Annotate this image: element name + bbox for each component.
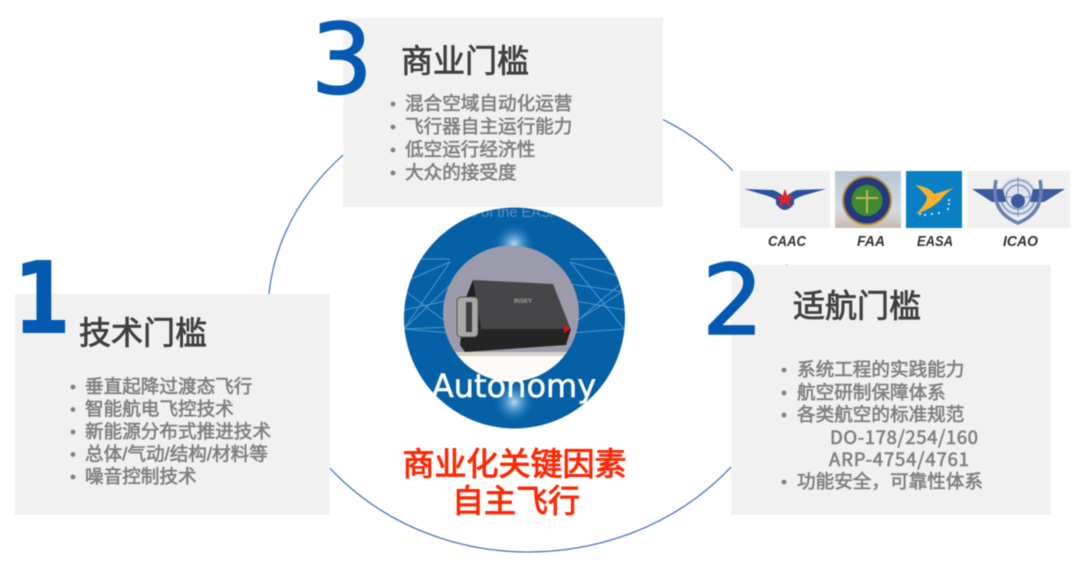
heading: technical threshold: 技术门槛 [79, 315, 207, 351]
list: commercial items [391, 93, 572, 183]
logo label: EASA: EASA [917, 233, 953, 250]
logo: ICAO [967, 171, 1070, 228]
cycle ring [268, 88, 793, 552]
panel: commercial threshold [311, 3, 663, 207]
badge label: Autonomy [432, 367, 596, 405]
number 2: 2 [702, 244, 764, 357]
panel: logos [733, 160, 1080, 264]
red caption: 商业化关键因素 [402, 446, 627, 482]
badge background pattern [404, 205, 625, 424]
logo label: FAA: FAA [857, 233, 885, 250]
device photo: INSKY [514, 299, 532, 305]
number 3: 3 [311, 3, 373, 116]
logo: EASA [906, 171, 962, 228]
logo label: CAAC: CAAC [768, 233, 807, 250]
list: airworthiness items: 功能安全，可靠性体系 [797, 471, 983, 492]
list: commercial items: 混合空域自动化运营 [405, 93, 572, 114]
list: technical items: 垂直起降过渡态飞行 [85, 376, 252, 397]
list: technical items: 新能源分布式推进技术 [85, 421, 271, 442]
list: airworthiness items: 航空研制保障体系 [797, 382, 946, 403]
list: commercial items: 大众的接受度 [405, 162, 517, 183]
list: technical items: 总体/气动/结构/材料等 [85, 444, 268, 464]
logo label: ICAO: ICAO [1003, 233, 1038, 250]
heading: commercial threshold: 商业门槛 [401, 43, 529, 79]
list: technical items: 噪音控制技术 [85, 466, 197, 487]
panel: airworthiness threshold [702, 244, 1051, 515]
list: airworthiness items [782, 359, 983, 492]
panel: technical threshold [13, 241, 330, 515]
logo: FAA [835, 171, 901, 228]
list: airworthiness items: DO-178/254/160 [830, 423, 978, 450]
list: commercial items: 低空运行经济性 [405, 139, 535, 160]
central autonomy badge [404, 205, 625, 428]
heading: airworthiness threshold: 适航门槛 [793, 288, 921, 324]
list: technical items [71, 376, 271, 487]
number 1: 1 [13, 241, 71, 357]
logo: CAAC [740, 171, 830, 228]
list: commercial items: 飞行器自主运行能力 [405, 116, 572, 137]
list: airworthiness items: 系统工程的实践能力 [797, 359, 964, 380]
list: airworthiness items: 各类航空的标准规范 [797, 404, 964, 425]
red caption [402, 446, 627, 519]
badge background pattern: ale of the EASA r [458, 205, 568, 221]
list: airworthiness items: ARP-4754/4761 [829, 445, 969, 472]
list: technical items: 智能航电飞控技术 [85, 398, 234, 420]
device photo [440, 245, 582, 382]
red caption: 自主飞行 [452, 483, 580, 519]
